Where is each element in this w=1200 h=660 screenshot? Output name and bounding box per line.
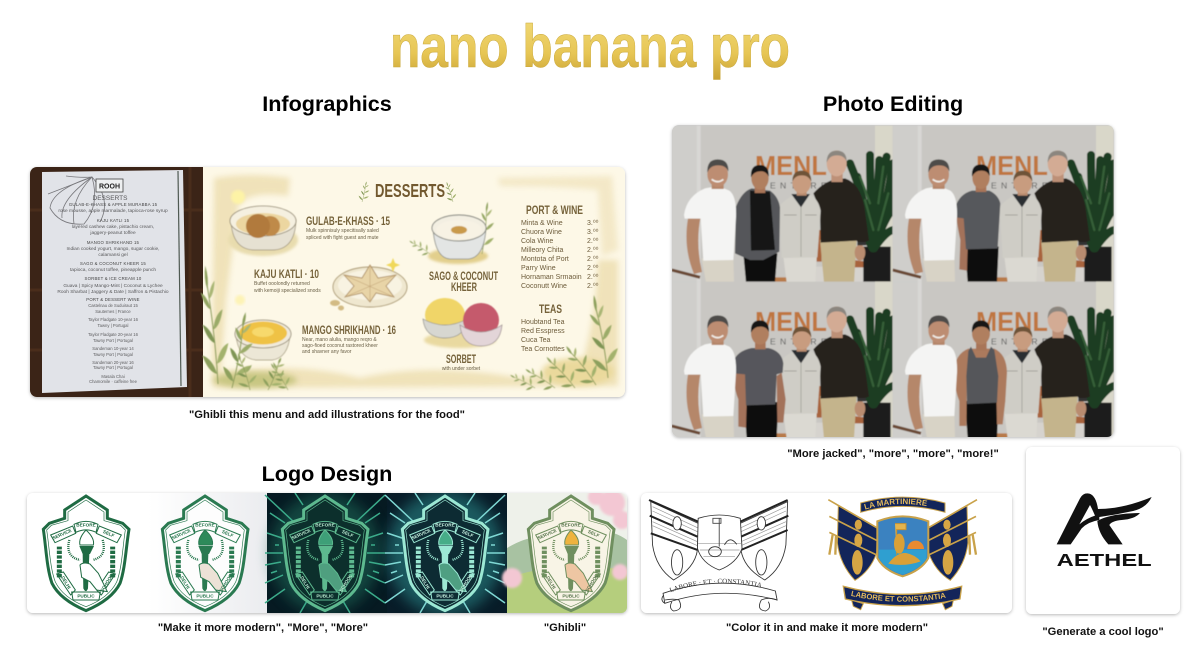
photo: original printed menu on wood table: Sauternes | France — [95, 309, 131, 314]
logo: original line art crest: BEFORE — [76, 523, 96, 528]
menu list: port and wine: Chuora Wine — [521, 229, 562, 236]
menu item: mango shrikhand: sago-fioed coconut rastored kheer — [302, 343, 378, 349]
photo: original printed menu on wood table: Tawny Port | Portugal — [93, 352, 133, 357]
photo: original printed menu on wood table: SORBET & ICE CREAM 10 — [85, 276, 142, 281]
photo: original printed menu on wood table: Tawny Port | Portugal — [93, 365, 133, 370]
logo: modernized crest: SERVICE — [171, 528, 191, 541]
photo: original printed menu on wood table: tapioca, coconut toffee, pineapple punch — [70, 267, 156, 273]
logo: original line art crest: SERVICE — [52, 528, 72, 541]
menu item: gulab-e-khass — [306, 216, 390, 240]
menu item: sago and coconut kheer — [429, 272, 498, 291]
panel: la martiniere crest before and after — [639, 492, 1014, 616]
logo: dark neon crest: SELF — [341, 529, 354, 538]
photo: original printed menu on wood table: Sandeman 10-year 14 — [92, 346, 134, 351]
menu item: sago and coconut kheer: SAGO & COCONUT — [429, 269, 498, 283]
menu item: kaju katli: with kemoiji specialized snods — [254, 288, 321, 294]
photo: original printed menu on wood table: DESSERTS — [93, 195, 128, 202]
photo: more jacked — [891, 120, 1118, 283]
menu list: port and wine: PORT & WINE — [526, 203, 583, 217]
logo: dark neon crest — [282, 496, 368, 611]
photo: more jacked: VENTURES — [981, 180, 1058, 190]
photo: original printed menu on wood table: Chamomile · caffeine free — [89, 379, 138, 384]
logo wordmark: aethel: AETHEL — [1057, 550, 1152, 570]
photo: original group: MENLO — [755, 150, 847, 181]
photo: original printed menu on wood table: Tawny | Portugal — [98, 323, 129, 328]
caption: ghibli crest prompt: "Ghibli" — [544, 622, 586, 634]
photo: original group — [670, 120, 897, 283]
menu list: port and wine: Montota of Port — [521, 256, 569, 263]
panel: infographics before and after menu — [30, 167, 625, 397]
menu list: teas: Tea Cornottes — [521, 346, 565, 353]
photo: more again: MENLO — [976, 306, 1068, 337]
logo: original line art crest: SELF — [102, 529, 115, 538]
logo: glowing cyber crest: SCHOOL — [458, 573, 473, 593]
photo: original printed menu on wood table: rose mousse, apple marmalade, tapioca-rose syrup — [58, 208, 168, 214]
panel: school crest logo iterations — [27, 489, 631, 615]
caption: crest modern prompt: "Make it more modern", "More", "More" — [158, 622, 368, 634]
logo: dark neon crest: PUBLIC — [316, 594, 334, 599]
menu item: kaju katli: KAJU KATLI · 10 — [254, 267, 319, 281]
photo: more again — [891, 276, 1118, 439]
logo: ghibli crest: BEFORE — [561, 523, 581, 528]
foliage: lower right sprigs — [510, 295, 618, 391]
logo: modernized crest — [162, 496, 248, 611]
logo: dark neon crest: SERVICE — [291, 528, 311, 541]
heading: infographics: Infographics — [262, 91, 392, 116]
photo: original printed menu on wood table: ROOH — [99, 184, 120, 190]
heading: logo design: Logo Design — [262, 461, 392, 486]
menu list: port and wine: 2.⁰⁰ — [587, 255, 599, 263]
menu list: port and wine: 2.⁰⁰ — [587, 246, 599, 254]
menu list: teas: Red Esspress — [521, 328, 565, 335]
food illustration: gulab bowl — [228, 206, 298, 256]
logo: aethel swoosh mark — [1057, 493, 1152, 544]
photo: original printed menu on wood table — [30, 167, 203, 397]
menu heading: desserts: DESSERTS — [375, 181, 445, 201]
panel: photo editing four stages — [670, 120, 1118, 439]
menu item: sorbet — [442, 354, 480, 370]
menu list: teas: TEAS — [539, 302, 562, 316]
photo: original printed menu on wood table: Rooh Sharbat | Jaggery & Date | Saffron & Pistachio — [57, 289, 169, 295]
menu list: port and wine: Hornaman Srmaoin — [521, 274, 582, 281]
caption: aethel prompt: "Generate a cool logo" — [1042, 626, 1164, 638]
photo: original printed menu on wood table: KAJU KATLI 15 — [97, 218, 130, 223]
logo: glowing cyber crest — [402, 496, 488, 611]
photo: original printed menu on wood table: Masala Chai — [101, 374, 125, 379]
photo: more jacked: MENLO — [976, 150, 1068, 181]
menu list: port and wine: 3.⁰⁰ — [587, 228, 599, 236]
logo: glowing cyber crest: SERVICE — [411, 528, 431, 541]
photo: original printed menu on wood table: Taylor Fladgate 10-year 16 — [88, 317, 139, 322]
caption: photo editing prompt: "More jacked", "more", "more", "more!" — [787, 448, 999, 460]
menu heading: desserts — [358, 182, 456, 202]
photo: original printed menu on wood table: Tawny Port | Portugal — [93, 338, 133, 343]
logo: modernized crest: DELHI — [179, 575, 191, 590]
menu item: kaju katli: Buffet ooolondly returned — [254, 281, 310, 287]
photo: more: MENLO — [755, 306, 847, 337]
logo: modernized crest: PUBLIC — [196, 594, 214, 599]
logo: colored la martiniere crest: LABORE ET CONSTANTIA — [851, 590, 946, 602]
photo: more again: VENTURES — [981, 336, 1058, 346]
logo: dark neon crest: SCHOOL — [338, 573, 353, 593]
caption: infographics prompt: "Ghibli this menu and add illustrations for the food" — [189, 409, 465, 421]
menu list: port and wine: Coconutt Wine — [521, 283, 567, 290]
logo: modernized crest: BEFORE — [195, 523, 215, 528]
title: nano banana pro — [390, 13, 790, 80]
photo: original printed menu on wood table: SAGO & COCONUT KHEER 15 — [80, 261, 146, 266]
photo: original printed menu on wood table: Indian cooked yogurt, mango, sugar cookie, — [66, 246, 160, 252]
photo: original printed menu on wood table: Taylor Fladgate 20-year 16 — [88, 332, 139, 337]
menu list: teas — [521, 304, 564, 351]
logo: glowing cyber crest: PUBLIC — [436, 594, 454, 599]
logo: dark neon crest: DELHI — [299, 575, 311, 590]
logo: ghibli crest — [528, 496, 614, 611]
menu list: port and wine — [521, 203, 599, 290]
foliage: lower left sprigs — [193, 264, 297, 395]
logo: glowing cyber crest: BEFORE — [435, 523, 455, 528]
logo: original line art crest — [43, 496, 129, 611]
photo: original printed menu on wood table: GULAB-E-KHASS & APPLE MURABBA 15 — [69, 202, 158, 207]
photo: original printed menu on wood table: Castelnau de Suduiraut 15 — [88, 303, 138, 308]
photo: original printed menu on wood table: Guava | Spicy Mango-Mint | Coconut & Lychee — [63, 283, 163, 289]
photo: original group: VENTURES — [760, 180, 837, 190]
food illustration: sorbet bowls — [423, 298, 502, 348]
logo: ghibli crest: SELF — [587, 529, 600, 538]
photo: more: VENTURES — [760, 336, 837, 346]
menu item: gulab-e-khass: GULAB-E-KHASS · 15 — [306, 214, 390, 228]
photo: original printed menu on wood table: calamansi gel — [98, 252, 128, 258]
logo: glowing cyber crest: DELHI — [419, 575, 431, 590]
food illustration: kaju katli plate — [330, 258, 407, 310]
menu item: mango shrikhand: MANGO SHRIKHAND · 16 — [302, 323, 396, 337]
logo: ghibli crest: DELHI — [545, 575, 557, 590]
photo: original printed menu on wood table: jaggery-peanut toffee — [89, 230, 136, 236]
menu list: port and wine: Parry Wine — [521, 265, 556, 272]
menu item: gulab-e-khass: Mulk spinnisuly specitisally saled — [306, 228, 379, 234]
photo: original printed menu on wood table: layered cashew cake, pistachio cream, — [72, 224, 154, 230]
menu list: port and wine: 3.⁰⁰ — [587, 219, 599, 227]
menu list: port and wine: Milleory Chita — [521, 247, 564, 254]
photo: original printed menu on wood table: MANGO SHRIKHAND 15 — [87, 240, 140, 245]
menu list: port and wine: 2.⁰⁰ — [587, 273, 599, 281]
logo: colored la martiniere crest — [828, 496, 978, 610]
photo: more — [670, 276, 897, 439]
menu item: kaju katli — [254, 270, 321, 293]
menu list: port and wine: 2.⁰⁰ — [587, 282, 599, 290]
logo: original line art crest: PUBLIC — [77, 594, 95, 599]
food illustration: mango shrikhand bowl — [235, 320, 291, 360]
menu list: port and wine: Cola Wine — [521, 238, 553, 245]
panel: aethel logo card — [1026, 447, 1180, 614]
logo: ghibli crest: SCHOOL — [584, 573, 599, 593]
logo: ghibli crest: SERVICE — [537, 528, 557, 541]
logo: dark neon crest: BEFORE — [315, 523, 335, 528]
menu item: mango shrikhand: and shavner any favor — [302, 349, 352, 355]
menu item: gulab-e-khass: spliced with fight guest and mute — [306, 235, 379, 241]
food illustration: sago kheer bowl — [406, 201, 500, 264]
menu list: port and wine: 2.⁰⁰ — [587, 264, 599, 272]
menu list: teas: Cuca Tea — [521, 337, 551, 344]
logo: modernized crest: SELF — [221, 529, 234, 538]
logo: original line art crest: DELHI — [60, 575, 72, 590]
caption: la martiniere prompt: "Color it in and make it more modern" — [726, 622, 928, 634]
menu list: teas: Houbtand Tea — [521, 319, 565, 326]
menu item: mango shrikhand — [302, 326, 396, 354]
menu item: sorbet: SORBET — [446, 352, 476, 366]
menu item: mango shrikhand: Near, mano alulia, mango reqro & — [302, 337, 377, 343]
logo: ghibli crest: PUBLIC — [562, 594, 580, 599]
illustration: ghibli dessert menu — [193, 167, 625, 397]
logo: hand drawn crest sketch — [648, 499, 789, 612]
menu list: port and wine: Minta & Wine — [521, 220, 563, 227]
logo: original line art crest: SCHOOL — [99, 573, 114, 593]
photo: original printed menu on wood table: Sandeman 20-year 16 — [92, 360, 134, 365]
logo: colored la martiniere crest: LA MARTINIERE — [864, 498, 928, 510]
heading: photo editing: Photo Editing — [823, 91, 963, 116]
logo: hand drawn crest sketch: LABORE · ET · CONSTANTIA — [669, 578, 761, 592]
logo: glowing cyber crest: SELF — [461, 529, 474, 538]
menu item: sago and coconut kheer: KHEER — [451, 280, 477, 294]
menu list: port and wine: 2.⁰⁰ — [587, 237, 599, 245]
logo: modernized crest: SCHOOL — [218, 573, 233, 593]
photo: original printed menu on wood table: PORT & DESSERT WINE — [86, 297, 140, 302]
menu item: sorbet: with under sorbet — [442, 366, 481, 372]
